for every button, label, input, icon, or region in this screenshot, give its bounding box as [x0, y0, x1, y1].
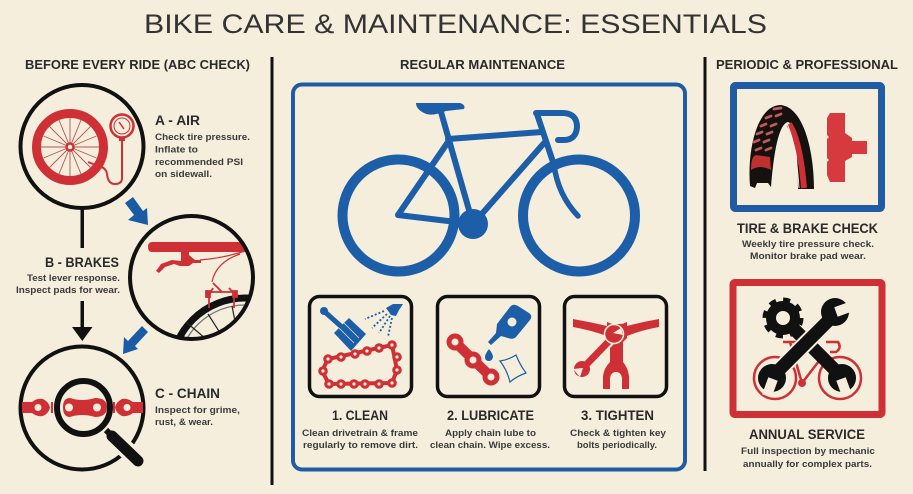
icon: red bicycle — [754, 342, 861, 399]
icon: dirty chain — [320, 342, 400, 387]
text: A air — [155, 113, 250, 180]
arrow: blue B to C — [123, 326, 148, 354]
panel: periodic and professional — [716, 58, 898, 470]
text: B brakes: B - BRAKES — [45, 255, 119, 270]
text: B brakes: Inspect pads for wear. — [16, 285, 120, 296]
icon: brakes circle — [128, 214, 255, 341]
card: clean — [302, 296, 418, 451]
text: A air: Check tire pressure. — [155, 132, 250, 143]
panel: before every ride — [16, 60, 255, 472]
label: lubricate: clean chain. Wipe excess. — [430, 440, 550, 451]
label: tighten: 3. TIGHTEN — [581, 408, 654, 423]
text: C chain: rust, & wear. — [155, 417, 213, 428]
label: lubricate: Apply chain lube to — [445, 428, 536, 439]
icon: shower spray — [365, 304, 403, 337]
icon: air circle — [20, 85, 144, 208]
label: tire and brake check: Monitor brake pad wear. — [750, 251, 866, 262]
icon: handlebar and fork — [573, 319, 659, 389]
label: annual service: Full inspection by mechanic — [741, 446, 875, 457]
wrench to upper right — [758, 298, 855, 398]
label: annual service: ANNUAL SERVICE — [749, 427, 865, 442]
text: A air: on sidewall. — [155, 169, 212, 180]
icon: blue bicycle — [342, 103, 635, 272]
label: clean: 1. CLEAN — [332, 408, 388, 423]
icon: chain link — [446, 334, 500, 386]
label: tighten: bolts periodically. — [577, 440, 657, 451]
label: tire and brake check: Weekly tire pressure check. — [742, 239, 874, 250]
icon: brush — [320, 307, 366, 351]
icon: chain circle — [20, 346, 144, 470]
text: C chain: Inspect for grime, — [155, 405, 240, 416]
magnifier — [57, 381, 139, 461]
chain links — [22, 398, 143, 417]
label: annual service — [741, 427, 875, 470]
icon: small wrench — [573, 324, 624, 377]
wrench to lower right — [790, 325, 856, 398]
card: tire and brake check — [734, 86, 882, 262]
arrow: B to C — [72, 301, 92, 341]
card: annual service — [733, 282, 882, 470]
front wheel — [176, 294, 248, 337]
card: lubricate — [430, 296, 550, 451]
label: annual service: annually for complex parts. — [743, 459, 872, 470]
heading: periodic and professional: PERIODIC & PROFESSIONAL — [716, 58, 898, 72]
label: tighten: Check & tighten key — [570, 428, 667, 439]
text: A air: Inflate to — [155, 144, 198, 156]
handlebar — [148, 242, 250, 252]
card: tighten — [564, 296, 667, 451]
icon: gear — [765, 300, 801, 336]
arrow: blue A to B — [125, 197, 148, 225]
text: C chain — [155, 386, 240, 428]
heading: regular maintenance: REGULAR MAINTENANCE — [400, 58, 565, 72]
tire wheel — [36, 114, 104, 180]
label: lubricate — [430, 408, 550, 451]
label: clean: Clean drivetrain & frame — [302, 428, 418, 439]
icon: cloth — [500, 355, 526, 382]
text: B brakes: Test lever response. — [27, 273, 120, 284]
text: A air: recommended PSI — [155, 157, 243, 168]
text: C chain: C - CHAIN — [155, 386, 220, 401]
text: B brakes — [16, 255, 120, 296]
label: tire and brake check: TIRE & BRAKE CHECK — [737, 221, 878, 236]
blue frame — [293, 84, 685, 470]
label: clean — [302, 408, 418, 451]
brake caliper — [206, 283, 237, 308]
label: lubricate: 2. LUBRICATE — [447, 408, 534, 423]
icon: tire — [749, 105, 814, 189]
label: tighten — [570, 408, 667, 451]
heading: before every ride: BEFORE EVERY RIDE (ABC CHECK) — [25, 58, 250, 72]
brake lever — [156, 252, 201, 273]
label: clean: regularly to remove dirt. — [303, 440, 418, 451]
icon: crossed wrenches — [758, 298, 856, 398]
label: tire and brake check — [737, 221, 878, 262]
panel: regular maintenance — [293, 58, 685, 470]
pressure gauge — [88, 114, 134, 184]
text: A air: A - AIR — [155, 113, 200, 128]
icon: lube bottle — [485, 305, 531, 361]
icon: brake pad — [827, 113, 867, 182]
connector line A to B — [80, 209, 84, 248]
title: BIKE CARE & MAINTENANCE: ESSENTIALS — [144, 9, 767, 39]
